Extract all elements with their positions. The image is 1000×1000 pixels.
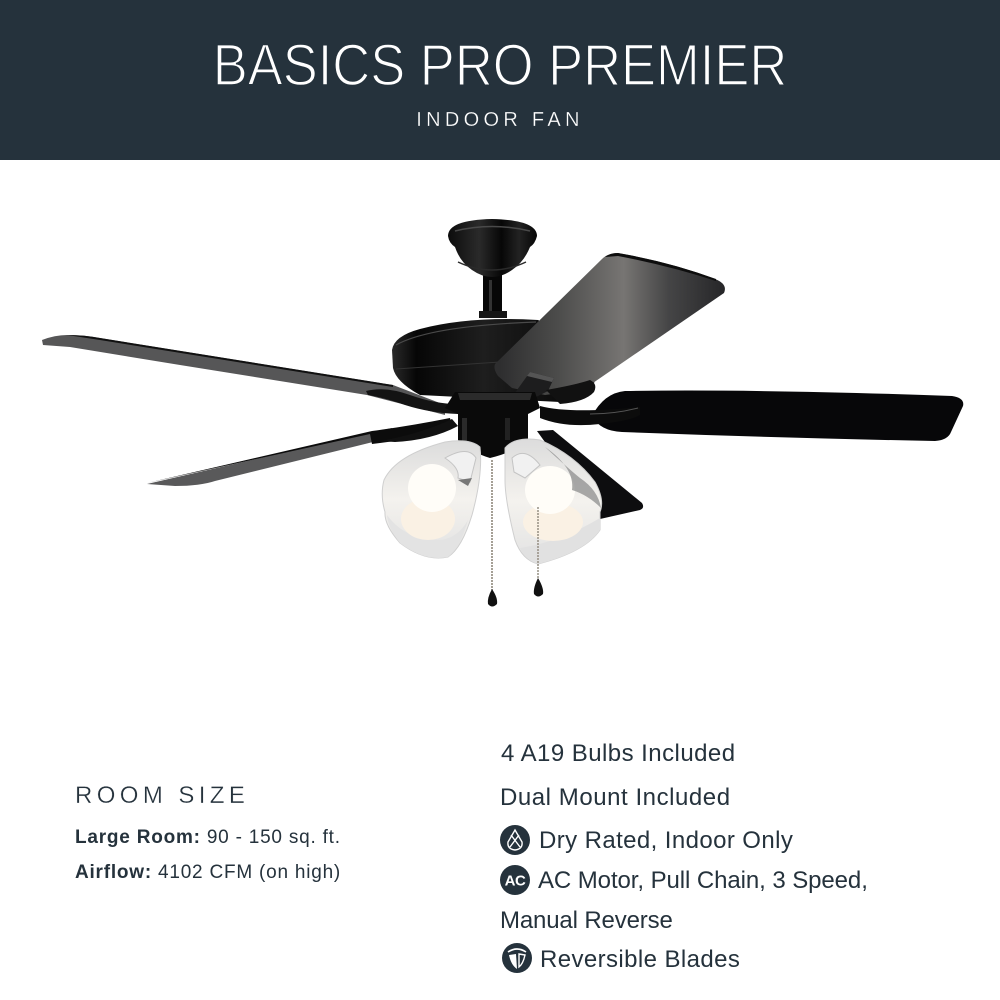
ceiling canopy: [448, 219, 537, 277]
icon: ac motor: [500, 865, 530, 895]
blade: far left: [42, 335, 445, 415]
blade: upper right: [494, 253, 725, 395]
icon: reversible blades: [502, 943, 532, 973]
blade: back right: [537, 430, 643, 519]
downrod: [479, 268, 507, 318]
left glass shade: [382, 441, 481, 558]
feature list: [500, 740, 868, 973]
feature: dry rated: Dry Rated, Indoor Only: [539, 827, 793, 854]
subtitle: INDOOR FAN: [416, 109, 584, 131]
blade: lower left: [147, 418, 452, 486]
icon: dry rated: [500, 825, 530, 855]
title: BASICS PRO PREMIER: [213, 33, 787, 98]
feature: ac motor: AC Motor, Pull Chain, 3 Speed,: [538, 867, 868, 894]
blade irons: [366, 380, 640, 442]
airflow value: Airflow: 4102 CFM (on high): [75, 862, 341, 883]
blade bracket: [504, 372, 554, 408]
motor housing: [392, 319, 595, 402]
feature: manual reverse: Manual Reverse: [500, 907, 673, 934]
right glass shade: [505, 439, 602, 564]
room size heading: ROOM SIZE: [75, 782, 249, 809]
room size panel: [75, 782, 341, 883]
feature: bulbs: 4 A19 Bulbs Included: [501, 740, 736, 767]
switch housing: [445, 392, 540, 458]
room size value: Large Room: 90 - 150 sq. ft.: [75, 827, 341, 848]
feature: mount: Dual Mount Included: [500, 784, 731, 811]
header banner: [0, 0, 1000, 160]
blade: far right: [592, 391, 963, 441]
feature: reversible blades: Reversible Blades: [540, 946, 740, 973]
icon: ac motor: AC: [505, 872, 526, 890]
pull chains: [488, 460, 543, 606]
